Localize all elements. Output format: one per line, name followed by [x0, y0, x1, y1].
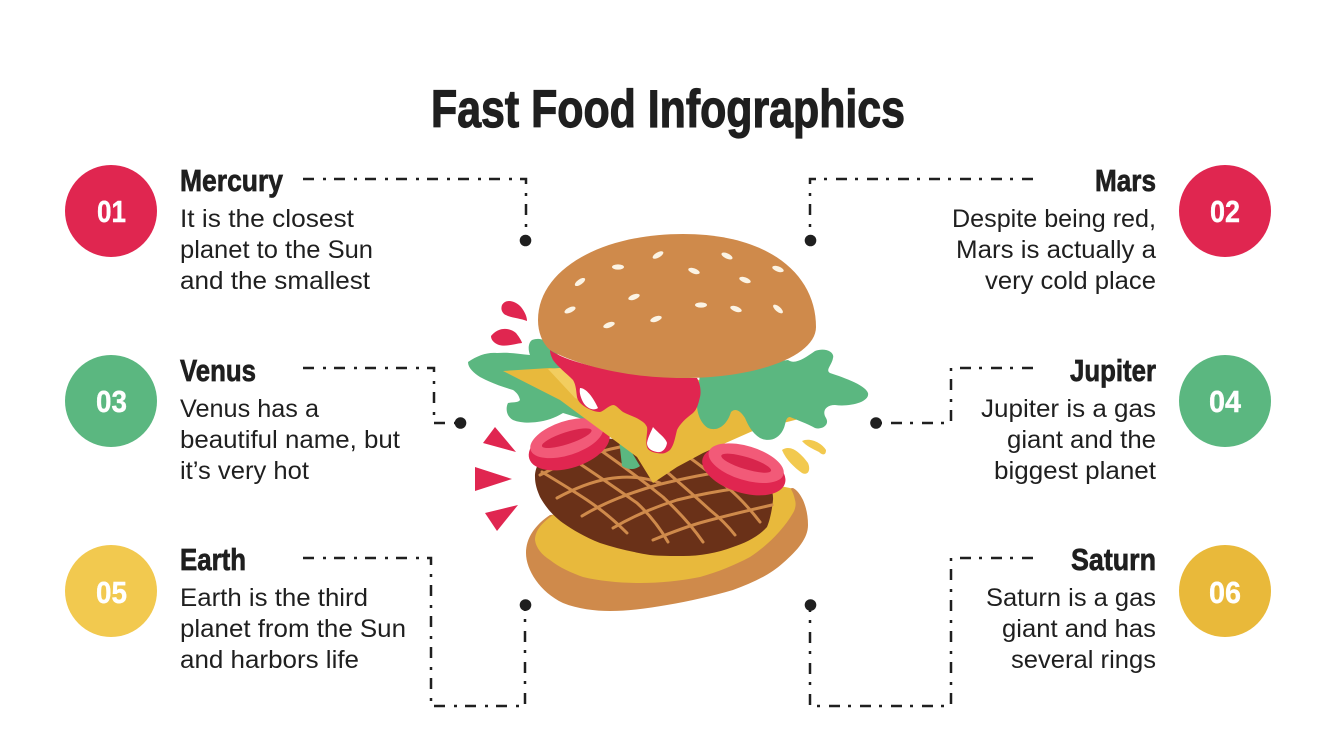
cheese slice: [503, 368, 803, 483]
number badge 06: 06: [1209, 575, 1241, 610]
panel: Earth: [65, 542, 531, 706]
description: Saturn: Saturn is a gas: [986, 584, 1156, 612]
description: Earth: [180, 584, 406, 674]
left lettuce: [468, 339, 640, 469]
description: Mars: very cold place: [985, 267, 1156, 295]
right lettuce: [697, 350, 868, 440]
panel: Mercury: [65, 163, 531, 295]
description: Mercury: planet to the Sun: [180, 236, 373, 264]
yellow motion dashes: [782, 440, 826, 474]
connector: Mercury: [303, 179, 531, 246]
grill marks: [540, 447, 772, 542]
number badge 03: 03: [96, 384, 127, 419]
description: Venus: Venus has a: [180, 395, 319, 423]
connector: Mars: [805, 179, 1033, 246]
description: Venus: beautiful name, but: [180, 426, 400, 454]
description: Jupiter: giant and the: [1007, 426, 1156, 454]
description: Mars: Mars is actually a: [956, 236, 1156, 264]
red motion triangles: [475, 427, 518, 531]
description: Jupiter: biggest planet: [994, 457, 1156, 485]
number badge 05: 05: [96, 575, 127, 610]
description: Venus: [180, 395, 400, 485]
ketchup highlights: [580, 388, 667, 452]
number badge 01: [65, 165, 157, 257]
sesame seeds: [563, 250, 785, 329]
description: Mars: Despite being red,: [952, 205, 1156, 233]
tomato slice right: [696, 434, 792, 504]
connector: Jupiter: [870, 368, 1033, 429]
description: Mars: [952, 205, 1156, 295]
number badge 04: 04: [1209, 384, 1242, 419]
description: Mercury: It is the closest: [180, 205, 354, 233]
heading: Venus: Venus: [180, 353, 256, 388]
panel: Mars: [805, 163, 1271, 295]
description: Mercury: [180, 205, 373, 295]
description: Saturn: several rings: [1011, 646, 1156, 674]
description: Venus: it’s very hot: [180, 457, 309, 485]
cheese on bottom bun: [535, 470, 796, 583]
number badge 05: [65, 545, 157, 637]
number badge 02: 02: [1210, 194, 1240, 229]
connector: Saturn: [805, 558, 1033, 706]
panel: Jupiter: [870, 353, 1271, 485]
ketchup: [550, 350, 701, 454]
heading: Mercury: Mercury: [180, 163, 284, 198]
ketchup splashes: [491, 301, 527, 346]
bottom bun: [526, 488, 808, 611]
number badge 03: [65, 355, 157, 447]
connector: Earth: [303, 558, 531, 706]
heading: Mars: Mars: [1095, 163, 1156, 198]
description: Earth: planet from the Sun: [180, 615, 406, 643]
top bun: [538, 234, 816, 378]
description: Earth: and harbors life: [180, 646, 359, 674]
heading: Saturn: Saturn: [1071, 542, 1156, 577]
number badge 06: [1179, 545, 1271, 637]
icon: burger illustration: [468, 234, 868, 611]
description: Earth: Earth is the third: [180, 584, 368, 612]
tomato slice left: [522, 409, 616, 480]
heading: Earth: Earth: [180, 542, 246, 577]
description: Jupiter: [981, 395, 1156, 485]
cheese highlight: [548, 367, 592, 405]
number badge 01: 01: [97, 194, 126, 229]
patty: [535, 438, 773, 556]
description: Mercury: and the smallest: [180, 267, 370, 295]
heading: Jupiter: Jupiter: [1070, 353, 1156, 388]
panel: Venus: [65, 353, 466, 485]
title: Fast Food Infographics: [431, 80, 905, 139]
description: Saturn: [986, 584, 1156, 674]
description: Jupiter: Jupiter is a gas: [981, 395, 1156, 423]
panel: Saturn: [805, 542, 1271, 706]
number badge 04: [1179, 355, 1271, 447]
description: Saturn: giant and has: [1002, 615, 1156, 643]
number badge 02: [1179, 165, 1271, 257]
connector: Venus: [303, 368, 466, 429]
